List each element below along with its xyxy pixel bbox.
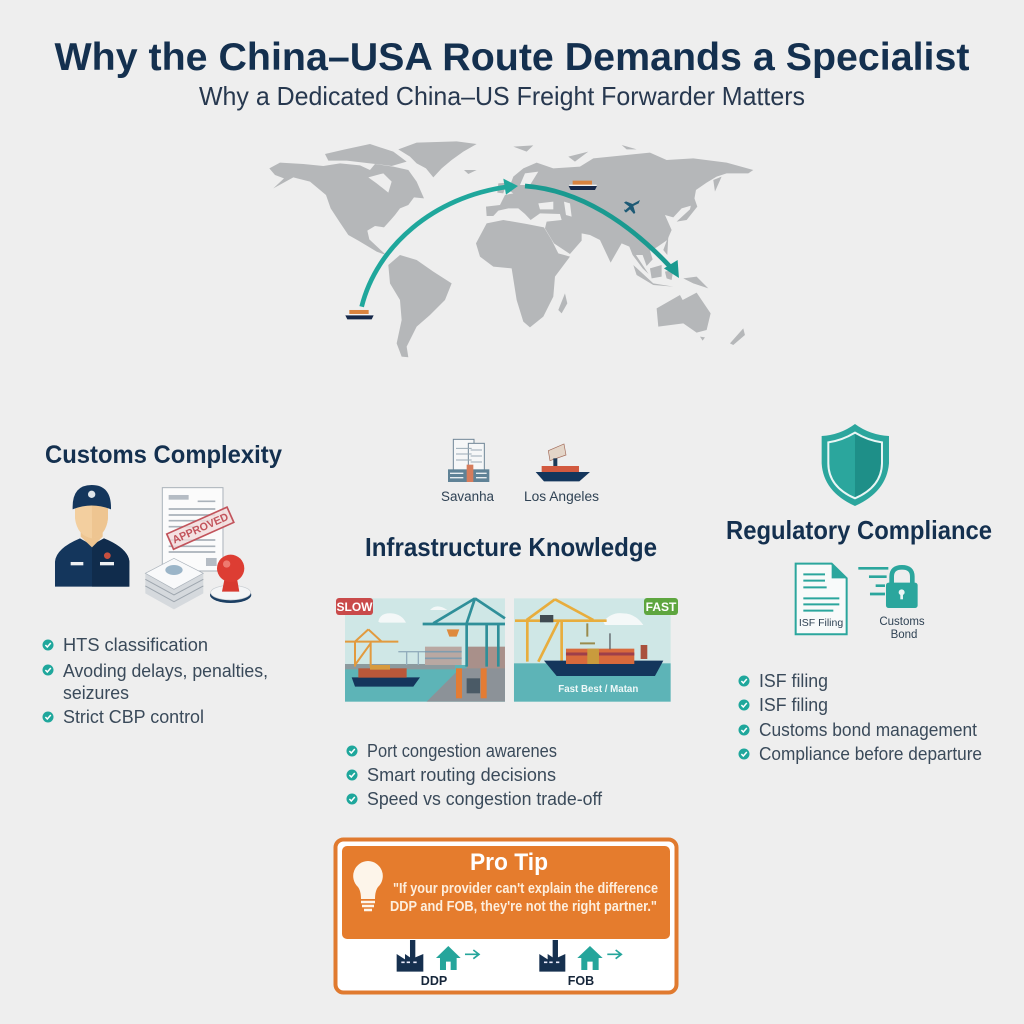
bullet list: compliance: Customs bond management: [759, 720, 977, 740]
diagram: DDP: DDP: [421, 974, 447, 988]
quote line 1: "If your provider can't explain the difference: [393, 881, 658, 897]
bullet list: infrastructure: Port congestion awarenes: [367, 741, 557, 761]
heading: customs complexity: Customs Complexity: [45, 441, 282, 469]
icon: Savanha port documents: [448, 439, 489, 482]
panel: regulatory compliance: [726, 424, 992, 764]
illustration: slow congested port: [345, 598, 505, 702]
heading: Pro Tip: Pro Tip: [470, 849, 548, 876]
icon: light bulb: [353, 861, 383, 910]
panel: customs complexity: [42, 441, 282, 727]
illustration: fast port: [514, 598, 671, 702]
bullet list: customs: HTS classification: [63, 635, 208, 655]
icon: ship on route: [569, 181, 597, 190]
diagram: FOB: FOB: [568, 974, 594, 988]
label: Savanha: Savanha: [441, 489, 494, 504]
icon: shield: [822, 424, 889, 506]
badge: SLOW: SLOW: [336, 600, 373, 614]
icon: airplane: [624, 200, 640, 214]
quote line 2: DDP and FOB, they're not the right partner.": [390, 899, 657, 915]
label: bond: Bond: [891, 629, 917, 641]
map: water bodies: [368, 172, 572, 244]
icon: customs officer: [55, 485, 129, 587]
icon: ISF filing document: ISF Filing: [799, 617, 843, 629]
bullet list: infrastructure: Smart routing decisions: [367, 765, 556, 785]
illustration: fast port: Fast Best / Matan: [558, 684, 638, 695]
heading: regulatory compliance: Regulatory Compliance: [726, 515, 992, 545]
bullet list: compliance: Compliance before departure: [759, 744, 982, 764]
panel: infrastructure knowledge: [336, 439, 678, 809]
map: continents: [269, 141, 753, 357]
bullet list: infrastructure: Speed vs congestion trade-off: [367, 789, 603, 809]
world map with route arcs: [269, 141, 753, 357]
icon: ship at route start: [345, 310, 374, 319]
icon: ISF filing document: [796, 564, 847, 634]
label: Los Angeles: Los Angeles: [524, 489, 599, 504]
subtitle: Why a Dedicated China–US Freight Forwarder Matters: [199, 81, 805, 111]
callout frame: [336, 840, 676, 992]
heading: infrastructure knowledge: Infrastructure Knowledge: [365, 532, 657, 562]
icon: Los Angeles ship: [536, 444, 590, 481]
icon: customs bond padlock: [858, 567, 918, 608]
badge: FAST: FAST: [646, 600, 677, 614]
title: Why the China–USA Route Demands a Specialist: [54, 36, 970, 79]
bullet list: compliance: [738, 671, 982, 764]
bullet list: infrastructure: [346, 741, 603, 809]
icon: approved document, papers and stamp: [145, 488, 251, 609]
bullet list: customs: Avoding delays, penalties,: [63, 661, 268, 681]
bullet list: customs: seizures: [63, 683, 129, 703]
bullet list: compliance: ISF filing: [759, 671, 828, 691]
diagram: DDP: [397, 940, 479, 988]
callout header: [342, 846, 670, 939]
route arc: Americas to Europe: [362, 179, 518, 307]
route arc: Europe to Asia: [525, 186, 679, 278]
diagram: FOB: [539, 940, 621, 988]
bullet list: customs: Strict CBP control: [63, 707, 204, 727]
bullet list: compliance: ISF filing: [759, 695, 828, 715]
label: customs: Customs: [879, 616, 925, 628]
bullet list: customs: [42, 635, 268, 727]
panel: pro tip callout: [336, 840, 676, 992]
icon: approved document, papers and stamp: APPROVED: [171, 511, 230, 546]
